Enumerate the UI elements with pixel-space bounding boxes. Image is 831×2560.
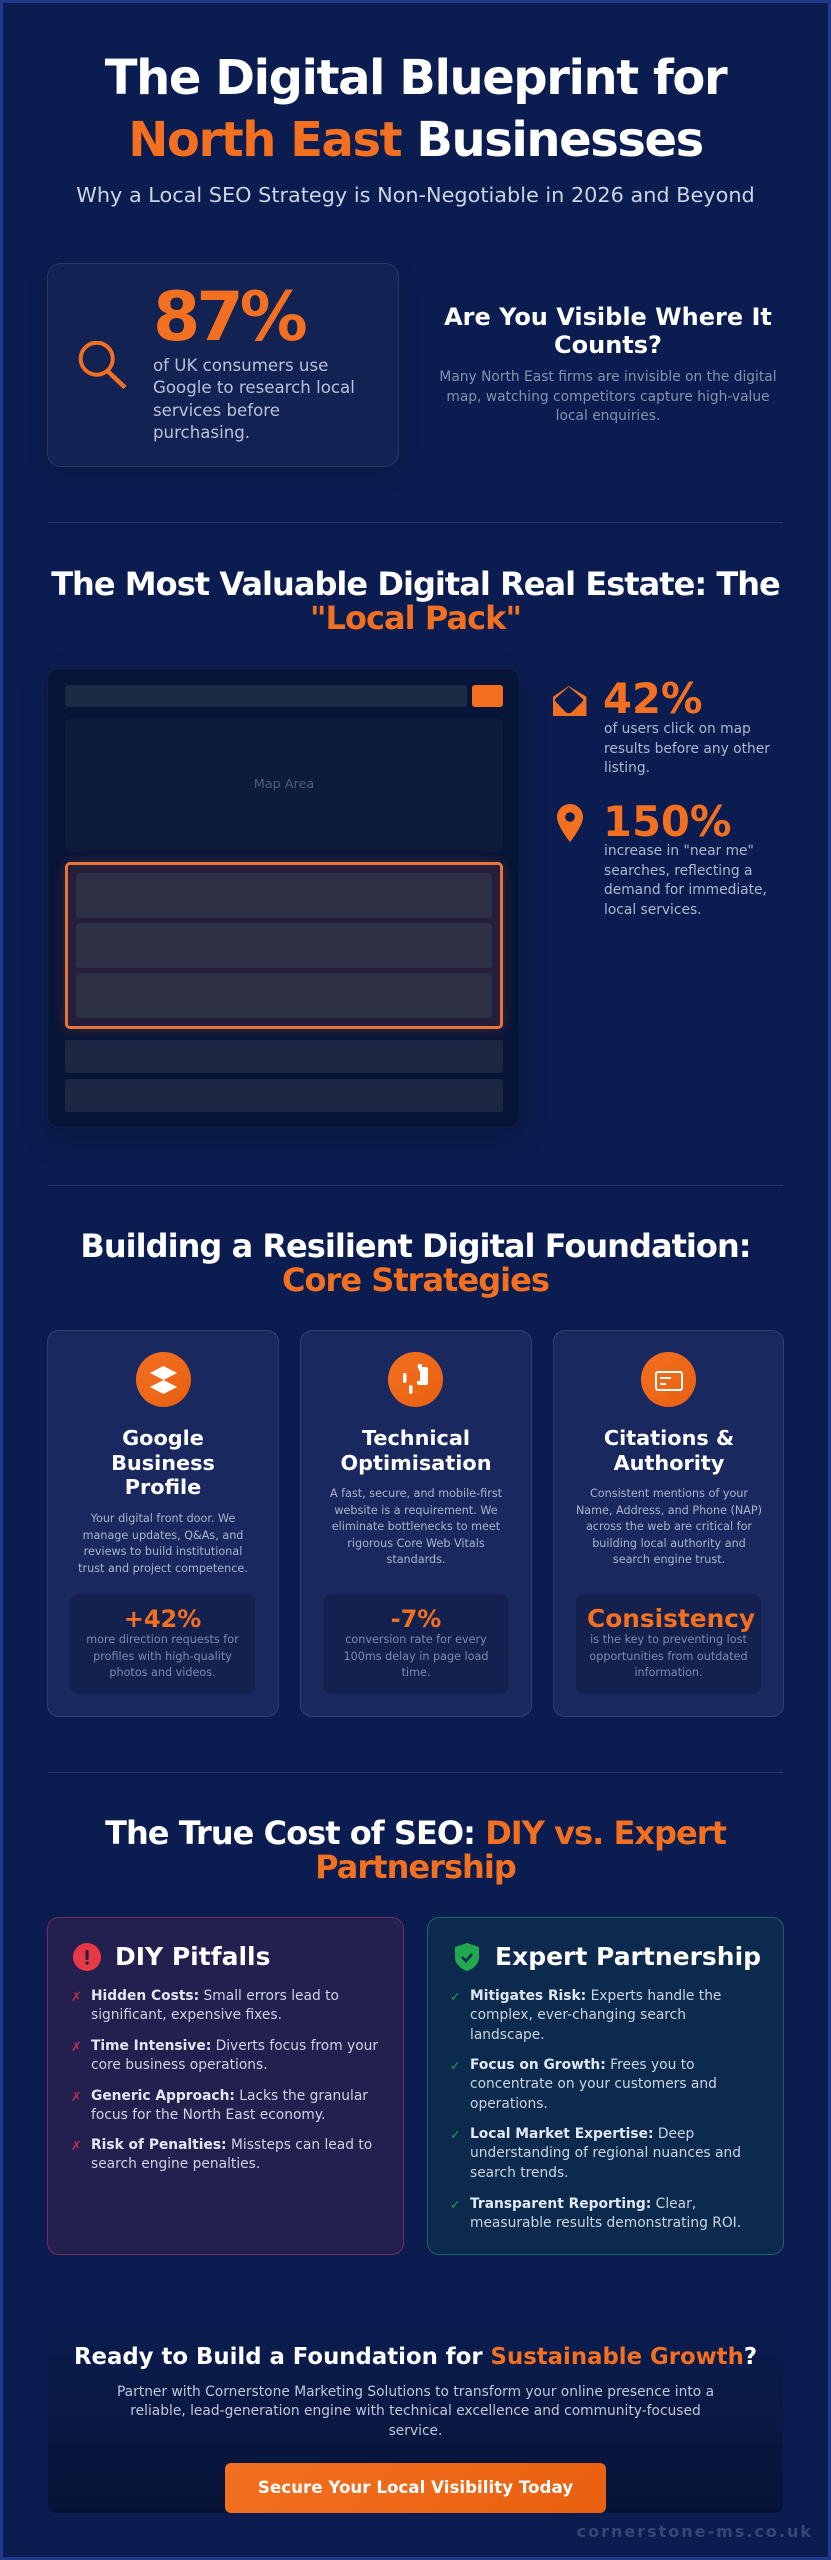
card text: trust and project competence. xyxy=(78,1562,248,1575)
icon: magnifying glass xyxy=(78,341,126,390)
cta text xyxy=(117,2384,714,2439)
panel: DIY pitfalls xyxy=(47,1917,404,2255)
metric box xyxy=(576,1594,761,1694)
metric text xyxy=(86,1633,239,1679)
metric text xyxy=(589,1633,748,1679)
stat description: increase in "near me" xyxy=(604,843,754,859)
benefit 1: complex, ever-changing search xyxy=(470,2007,686,2023)
title: The Digital Blueprint for xyxy=(105,50,726,106)
card text: manage updates, Q&As, and xyxy=(83,1529,243,1542)
icon: technical pieces xyxy=(388,1352,443,1407)
cta text: reliable, lead-generation engine with technical excellence and community-focused xyxy=(130,2403,701,2419)
callout text xyxy=(439,369,777,424)
icon: id card xyxy=(640,1352,696,1407)
callout heading: Are You Visible Where It xyxy=(444,303,772,331)
benefit 4: measurable results demonstrating ROI. xyxy=(470,2215,741,2231)
metric value: Consistency xyxy=(587,1604,755,1633)
pitfall 4 xyxy=(71,2137,372,2172)
card text: website is a requirement. We xyxy=(334,1504,498,1517)
pitfall 1: significant, expensive fixes. xyxy=(91,2007,282,2023)
icon: warning xyxy=(73,1943,101,1971)
card text xyxy=(78,1512,248,1575)
metric text: time. xyxy=(402,1666,430,1679)
watermark: cornerstone-ms.co.uk xyxy=(577,2522,813,2541)
pitfall 3 xyxy=(71,2088,368,2123)
icon: map pin xyxy=(557,804,583,842)
cta text: service. xyxy=(389,2423,442,2439)
card title: Profile xyxy=(125,1475,201,1499)
stat number: 87% xyxy=(153,278,304,357)
stat description: local services. xyxy=(604,902,702,918)
card title: Business xyxy=(111,1451,215,1475)
organic result 1 xyxy=(65,1040,503,1073)
panel: call to action xyxy=(48,2320,783,2513)
organic result 2 xyxy=(65,1079,503,1112)
callout text: map, watching competitors capture high-value xyxy=(446,388,770,404)
subtitle: Why a Local SEO Strategy is Non-Negotiable in 2026 and Beyond xyxy=(76,183,755,207)
metric text: conversion rate for every xyxy=(345,1633,487,1646)
benefit 2: ✓ xyxy=(450,2059,461,2074)
listing 3 xyxy=(76,973,492,1018)
card text: Name, Address, and Phone (NAP) xyxy=(576,1504,762,1517)
pitfall 4: search engine penalties. xyxy=(91,2156,260,2172)
benefit 3: search trends. xyxy=(470,2165,569,2181)
metric box xyxy=(323,1594,509,1694)
panel heading: DIY Pitfalls xyxy=(115,1942,270,1971)
callout text: Many North East firms are invisible on the digital xyxy=(439,369,777,385)
cta text: Partner with Cornerstone Marketing Solutions to transform your online presence into a xyxy=(117,2384,714,2400)
metric text: opportunities from outdated xyxy=(589,1650,748,1663)
metric text: 100ms delay in page load xyxy=(344,1650,488,1663)
card text: Consistent mentions of your xyxy=(590,1487,748,1500)
benefit 3: ✓ xyxy=(450,2128,461,2143)
pitfall 1 xyxy=(71,1988,339,2023)
stat description: demand for immediate, xyxy=(604,882,767,898)
benefit 4 xyxy=(450,2196,741,2231)
card text: search engine trust. xyxy=(613,1553,725,1566)
search bar xyxy=(65,685,467,707)
stat description: listing. xyxy=(604,760,650,776)
stat: 150% xyxy=(557,797,767,918)
heading: local pack: "Local Pack" xyxy=(310,598,521,636)
panel heading: Expert Partnership xyxy=(495,1942,761,1971)
stat number: 42% xyxy=(603,674,703,723)
stat number: 150% xyxy=(603,797,732,846)
list: benefits xyxy=(450,1988,741,2231)
panel: technical optimisation xyxy=(300,1330,532,1717)
heading: local pack xyxy=(51,565,780,636)
metric value: +42% xyxy=(124,1605,201,1633)
card text xyxy=(330,1487,502,1566)
title xyxy=(104,50,728,168)
stat description xyxy=(604,721,770,776)
stat: 42% xyxy=(553,674,770,776)
heading: true cost: Partnership xyxy=(315,1848,516,1886)
button label: Secure Your Local Visibility Today xyxy=(258,2477,573,2497)
benefit 3 xyxy=(450,2126,741,2181)
card title xyxy=(604,1426,734,1475)
pitfall 4: ✗ xyxy=(71,2139,82,2154)
metric text: profiles with high-quality xyxy=(93,1650,232,1663)
cta button xyxy=(225,2463,606,2513)
benefit 2: operations. xyxy=(470,2096,548,2112)
metric text xyxy=(344,1633,488,1679)
icon: open envelope xyxy=(553,686,586,716)
card title xyxy=(111,1426,215,1499)
benefit 1: landscape. xyxy=(470,2027,545,2043)
heading: core strategies: Building a Resilient Digital Foundation: xyxy=(80,1227,751,1265)
card title xyxy=(340,1426,492,1475)
stat description: of users click on map xyxy=(604,721,751,737)
pitfall 3: focus for the North East economy. xyxy=(91,2107,325,2123)
pitfall 2: core business operations. xyxy=(91,2057,268,2073)
pitfall 3: Generic Approach: Lacks the granular xyxy=(91,2088,368,2104)
metric box xyxy=(70,1594,255,1694)
pitfall 2: Time Intensive: Diverts focus from your xyxy=(91,2038,378,2054)
list: pitfalls xyxy=(71,1988,378,2172)
panel: 87% stat card xyxy=(47,263,399,467)
listing 2 xyxy=(76,923,492,968)
stat description: searches, reflecting a xyxy=(604,862,752,878)
card text: across the web are critical for xyxy=(586,1520,752,1533)
local pack highlight xyxy=(65,862,503,1029)
card text xyxy=(576,1487,762,1566)
panel: citations and authority xyxy=(553,1330,784,1717)
pitfall 2: ✗ xyxy=(71,2040,82,2055)
icon: stacked diamonds xyxy=(136,1352,190,1407)
benefit 1: Mitigates Risk: Experts handle the xyxy=(470,1988,721,2004)
stat description: purchasing. xyxy=(153,423,250,442)
stat description xyxy=(604,843,767,918)
card text: rigorous Core Web Vitals xyxy=(347,1537,485,1550)
cta heading: Ready to Build a Foundation for Sustainable Growth? xyxy=(74,2344,757,2370)
heading: core strategies xyxy=(80,1227,751,1298)
stat description: Google to research local xyxy=(153,378,355,397)
card text: reviews to build institutional xyxy=(84,1545,242,1558)
heading: core strategies: Core Strategies xyxy=(282,1260,549,1298)
metric text: more direction requests for xyxy=(86,1633,239,1646)
callout heading xyxy=(444,303,772,359)
map label: Map Area xyxy=(254,777,314,792)
icon: shield check xyxy=(455,1943,479,1971)
card text: A fast, secure, and mobile-first xyxy=(330,1487,502,1500)
card title: Optimisation xyxy=(340,1451,492,1475)
benefit 4: ✓ xyxy=(450,2198,461,2213)
panel: google business profile xyxy=(47,1330,279,1717)
heading: true cost: The True Cost of SEO: DIY vs. Expert xyxy=(105,1814,726,1852)
heading: local pack: The Most Valuable Digital Real Estate: The xyxy=(51,565,780,603)
benefit 2: concentrate on your customers and xyxy=(470,2076,717,2092)
callout text: local enquiries. xyxy=(556,408,660,424)
card title: Citations & xyxy=(604,1426,734,1450)
benefit 4: Transparent Reporting: Clear, xyxy=(470,2196,696,2212)
metric value: -7% xyxy=(391,1605,441,1633)
card text: eliminate bottlenecks to meet xyxy=(332,1520,500,1533)
benefit 3: understanding of regional nuances and xyxy=(470,2145,741,2161)
card text: standards. xyxy=(386,1553,446,1566)
benefit 1: ✓ xyxy=(450,1990,461,2005)
metric text: is the key to preventing lost xyxy=(590,1633,747,1646)
search button xyxy=(472,685,503,707)
benefit 2 xyxy=(450,2057,717,2112)
benefit 2: Focus on Growth: Frees you to xyxy=(470,2057,695,2073)
callout heading: Counts? xyxy=(554,331,662,359)
stat description: results before any other xyxy=(604,740,770,756)
card title: Technical xyxy=(362,1426,470,1450)
heading: true cost xyxy=(105,1814,726,1886)
panel: expert partnership xyxy=(427,1917,784,2255)
stat description: services before xyxy=(153,401,280,420)
title: North East Businesses xyxy=(128,112,703,168)
card text: Your digital front door. We xyxy=(91,1512,235,1525)
card title: Google xyxy=(122,1426,204,1450)
pitfall 3: ✗ xyxy=(71,2090,82,2105)
panel: search results mockup xyxy=(47,668,520,1128)
pitfall 1: Hidden Costs: Small errors lead to xyxy=(91,1988,339,2004)
map area xyxy=(65,718,503,851)
card title: Authority xyxy=(614,1451,724,1475)
card text: building local authority and xyxy=(592,1537,746,1550)
benefit 1 xyxy=(450,1988,721,2043)
benefit 3: Local Market Expertise: Deep xyxy=(470,2126,694,2142)
metric text: photos and videos. xyxy=(109,1666,216,1679)
stat description: of UK consumers use xyxy=(153,356,328,375)
stat description xyxy=(153,356,355,442)
listing 1 xyxy=(76,873,492,918)
metric text: information. xyxy=(634,1666,703,1679)
pitfall 2 xyxy=(71,2038,378,2073)
pitfall 1: ✗ xyxy=(71,1990,82,2005)
pitfall 4: Risk of Penalties: Missteps can lead to xyxy=(91,2137,372,2153)
callout: are you visible xyxy=(439,303,777,424)
